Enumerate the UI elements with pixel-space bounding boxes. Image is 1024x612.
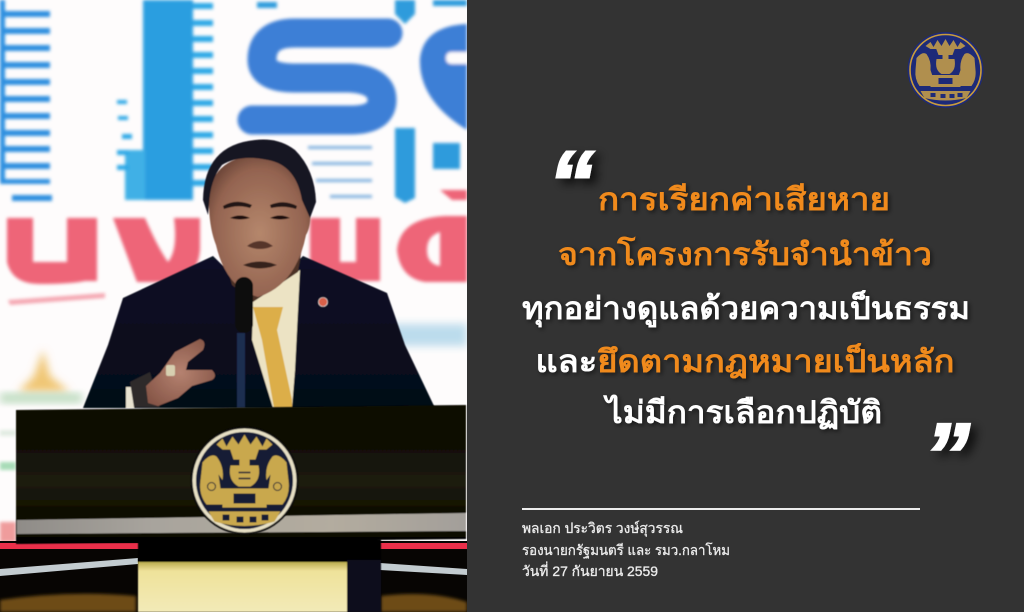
speaker name: พลเอก ประวิตร วงษ์สุวรรณ [522,520,683,537]
eyebrows [223,202,297,209]
tie [253,307,292,408]
shirt [252,270,300,408]
shirt cuff [126,387,134,408]
quote line 2: จากโครงการรับจำนำข้าว [558,236,932,272]
date: วันที่ 27 กันยายน 2559 [522,562,658,579]
quote line 1: การเรียกค่าเสียหาย [598,182,890,217]
hand [146,339,215,406]
floor strip [0,541,467,612]
ring [166,365,175,376]
face [209,155,310,297]
attribution divider [522,508,920,510]
backdrop blue partial letter [420,24,470,130]
quote line 5: ไม่มีการเลือกปฏิบัติ [603,394,882,430]
speaker title: รองนายกรัฐมนตรี และ รมว.กลาโหม [522,542,730,559]
neck [222,235,304,302]
hair [203,139,316,218]
quote line 4: และยึดตามกฎหมายเป็นหลัก [536,342,954,379]
microphone [235,277,253,333]
watch [130,372,160,407]
backdrop blue letter S [252,33,388,120]
mouth [243,262,277,268]
lower screen: temple and colour bands [18,350,70,392]
icon: opening quotation mark: “ [548,133,594,235]
panel: dark quote panel [467,0,1024,612]
icon: closing quotation mark: ” [924,405,970,507]
podium [16,405,466,612]
backdrop screen: blurred graphics [0,0,470,542]
speaker [83,139,435,408]
lapel pin [318,298,328,306]
quote line 3: ทุกอย่างดูแลด้วยความเป็นธรรม [522,289,970,328]
eyes [230,216,290,220]
icon: podium government seal [190,426,298,534]
panel: photo of speaker at podium [0,0,470,612]
backdrop red letters [7,190,467,305]
nose [247,241,273,249]
jacket [83,256,435,408]
quote text [522,182,970,430]
attribution text [522,520,730,579]
icon: government seal logo [908,32,984,108]
